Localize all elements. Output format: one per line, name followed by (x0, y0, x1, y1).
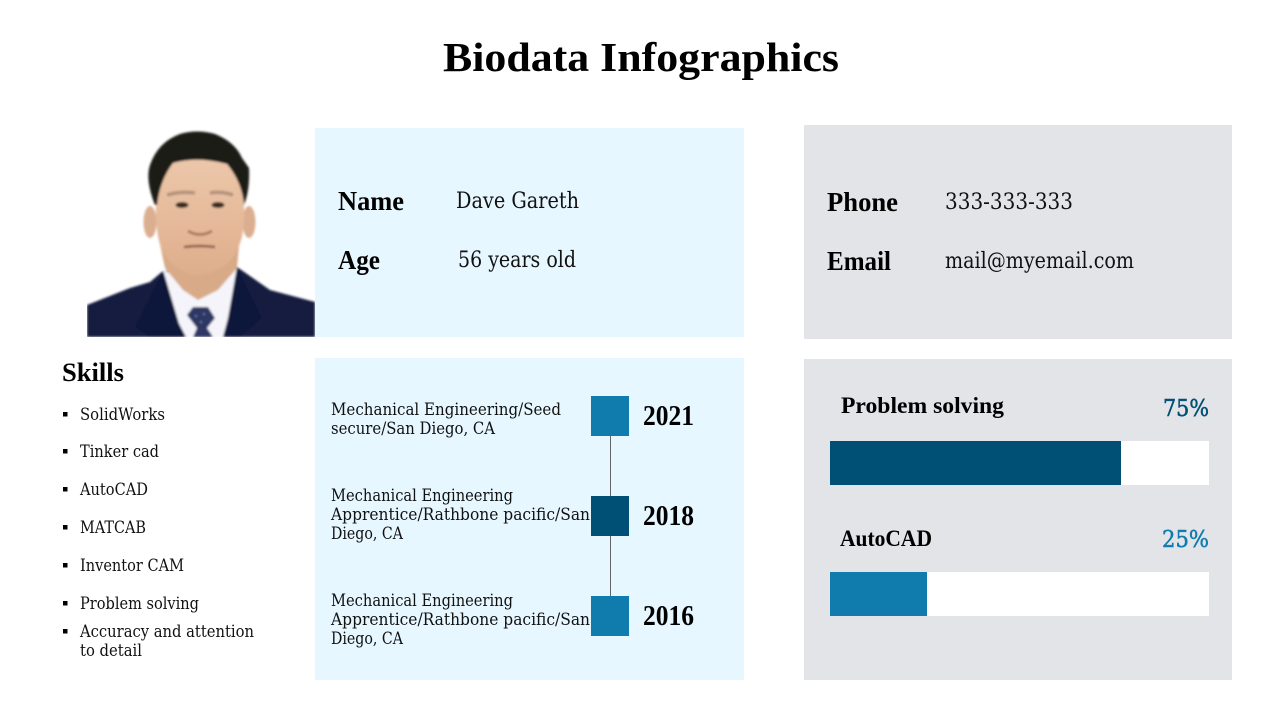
timeline entry 2016 (330, 591, 694, 648)
timeline entry 2018 (330, 486, 694, 543)
skill item: to detail (80, 641, 142, 660)
panel: contact (804, 125, 1232, 339)
phone value: 333-333-333 (945, 190, 1073, 215)
panel: name and age (315, 128, 744, 337)
name value: Dave Gareth (456, 189, 579, 214)
skill item: MATCAB (80, 518, 146, 537)
skill item (63, 622, 254, 660)
problem solving meter (830, 393, 1209, 485)
skill item: Inventor CAM (80, 556, 184, 575)
timeline entry 2021: secure/San Diego, CA (331, 419, 496, 438)
email value: mail@myemail.com (945, 249, 1134, 274)
skill item: Problem solving (80, 594, 199, 613)
timeline entry 2016: Mechanical Engineering (331, 591, 513, 610)
autocad meter: AutoCAD (840, 526, 932, 551)
panel: career timeline (315, 358, 744, 680)
timeline entry 2018: 2018 (643, 501, 694, 532)
skill item: Tinker cad (80, 442, 159, 461)
email label: Email (827, 246, 891, 276)
problem solving meter: Problem solving (841, 393, 1005, 418)
timeline entry 2016: 2016 (643, 601, 694, 632)
portrait photo (87, 132, 315, 337)
timeline entry 2021: Mechanical Engineering/Seed (331, 400, 561, 419)
phone label: Phone (827, 187, 898, 217)
autocad meter (830, 526, 1209, 616)
skills list (62, 358, 254, 660)
timeline entry 2016: Diego, CA (331, 629, 404, 648)
timeline entry 2018: Apprentice/Rathbone pacific/San (330, 505, 590, 524)
timeline entry 2018: Diego, CA (331, 524, 404, 543)
age value: 56 years old (458, 248, 576, 273)
panel: skill levels (804, 359, 1232, 680)
age label: Age (338, 245, 380, 275)
problem solving meter: 75% (1163, 396, 1209, 422)
autocad meter: 25% (1162, 527, 1209, 553)
timeline connector (610, 436, 612, 596)
skill item: SolidWorks (80, 405, 165, 424)
timeline entry 2021: 2021 (643, 401, 694, 432)
skill item: Accuracy and attention (79, 622, 254, 641)
timeline entry 2016: Apprentice/Rathbone pacific/San (330, 610, 590, 629)
skill item: AutoCAD (79, 480, 148, 499)
timeline entry 2018: Mechanical Engineering (331, 486, 513, 505)
name label: Name (338, 186, 404, 216)
skills heading: Skills (62, 358, 124, 387)
timeline entry 2021 (331, 396, 694, 438)
title: Biodata Infographics (443, 34, 839, 80)
